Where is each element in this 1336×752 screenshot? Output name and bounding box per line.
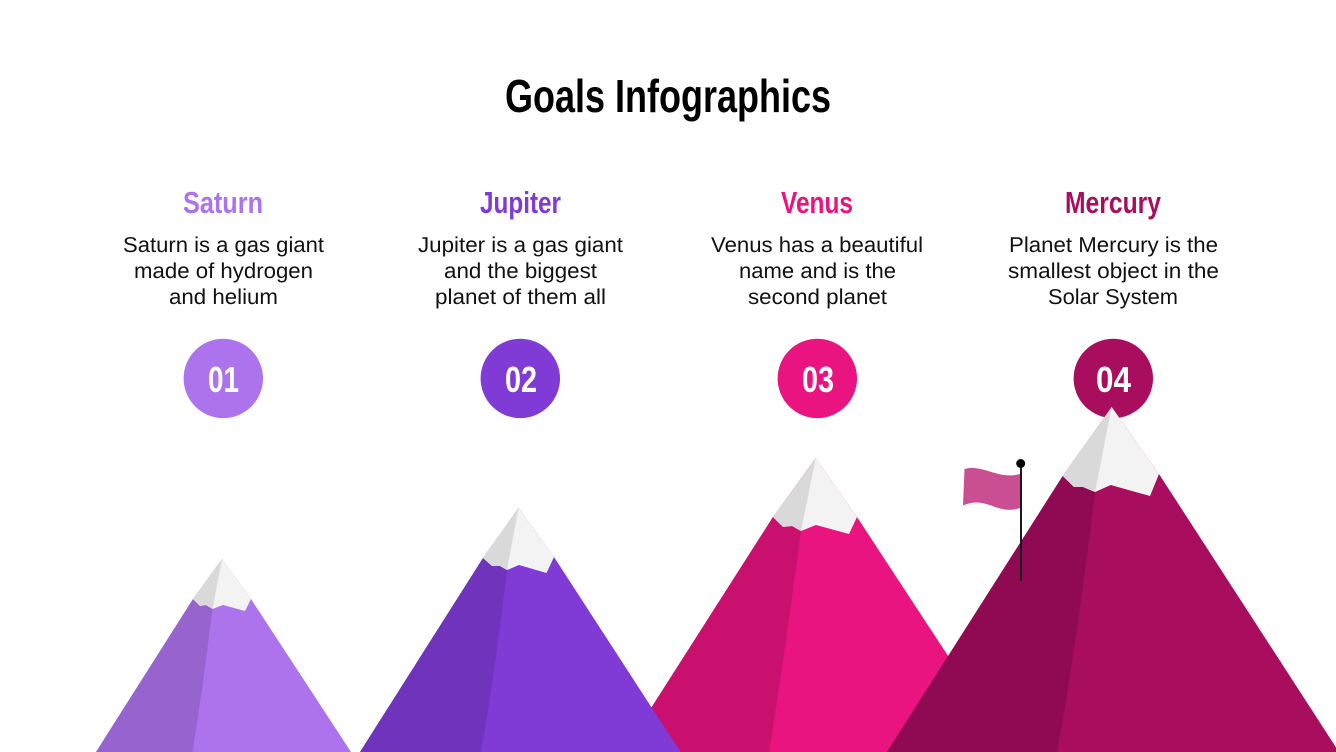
description: Venus: Venus has a beautiful — [711, 233, 923, 257]
column: Mercury — [1008, 185, 1219, 418]
description: Jupiter: planet of them all — [435, 285, 606, 309]
description: Saturn: made of hydrogen — [134, 259, 313, 283]
heading: Saturn: Saturn — [183, 185, 263, 220]
number badge 04 — [1074, 339, 1153, 418]
description: Mercury — [1008, 233, 1219, 309]
number badge 01: 01 — [208, 359, 239, 400]
column: Jupiter — [418, 185, 623, 418]
number badge 02 — [481, 339, 560, 418]
number badge 01 — [184, 339, 263, 418]
description: Mercury: smallest object in the — [1008, 259, 1219, 283]
description: Jupiter: Jupiter is a gas giant — [418, 233, 623, 257]
heading: Jupiter: Jupiter — [480, 185, 561, 220]
description: Venus — [711, 233, 923, 309]
description: Venus: second planet — [748, 285, 887, 309]
description: Venus: name and is the — [739, 259, 896, 283]
heading: Venus: Venus — [781, 185, 853, 220]
description: Jupiter — [418, 233, 623, 309]
title: Goals Infographics — [505, 70, 831, 122]
description: Mercury: Solar System — [1048, 285, 1178, 309]
description: Jupiter: and the biggest — [444, 259, 597, 283]
icon: flag — [963, 459, 1025, 581]
column: Venus — [711, 185, 923, 418]
number badge 02: 02 — [505, 359, 537, 400]
heading: Mercury: Mercury — [1065, 185, 1162, 220]
mountain: Mercury — [887, 407, 1336, 752]
column: Saturn — [123, 185, 324, 418]
mountain: Venus — [623, 458, 1011, 752]
mountain: Saturn — [96, 559, 351, 752]
description: Saturn: Saturn is a gas giant — [123, 233, 324, 257]
number badge 04: 04 — [1096, 359, 1131, 400]
description: Saturn — [123, 233, 324, 309]
description: Mercury: Planet Mercury is the — [1009, 233, 1218, 257]
number badge 03: 03 — [802, 359, 834, 400]
number badge 03 — [778, 339, 857, 418]
mountain: Jupiter — [360, 508, 680, 752]
description: Saturn: and helium — [169, 285, 278, 309]
